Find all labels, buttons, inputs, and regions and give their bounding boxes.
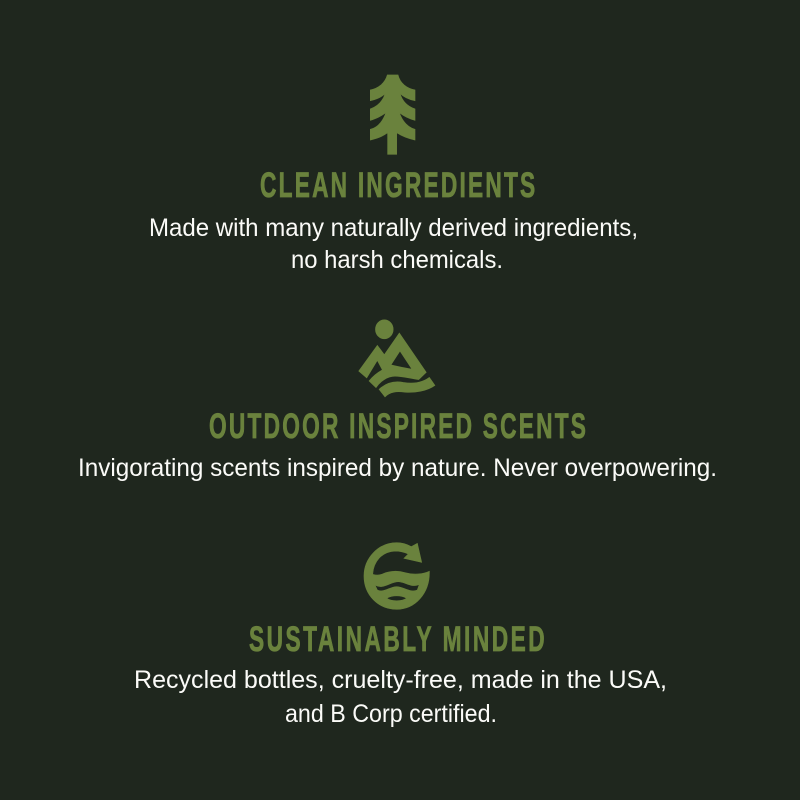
text block: clean ingredients description: no harsh chemicals.: [291, 246, 503, 274]
text block: outdoor inspired scents description: Invigorating scents inspired by nature. Never overpowering.: [78, 454, 717, 482]
icon: sun, mountains and waves: [359, 320, 435, 397]
text block: clean ingredients description: Made with many naturally derived ingredients,: [149, 214, 638, 242]
panel: sustainably minded: [134, 543, 667, 728]
panel: clean ingredients: [149, 75, 638, 274]
text block: sustainably minded description: and B Corp certified.: [285, 700, 497, 728]
text block: clean ingredients description: [149, 214, 638, 274]
heading: sustainably minded: SUSTAINABLY MINDED: [249, 620, 545, 659]
icon: pine tree: [370, 75, 415, 154]
text block: sustainably minded description: [134, 666, 667, 728]
heading: clean ingredients: CLEAN INGREDIENTS: [260, 166, 535, 205]
heading: outdoor inspired scents: OUTDOOR INSPIRED SCENTS: [209, 407, 586, 446]
icon: recycling arrow and water: [364, 543, 429, 609]
text block: sustainably minded description: Recycled bottles, cruelty-free, made in the USA,: [134, 666, 667, 694]
panel: outdoor inspired scents: [78, 320, 717, 482]
